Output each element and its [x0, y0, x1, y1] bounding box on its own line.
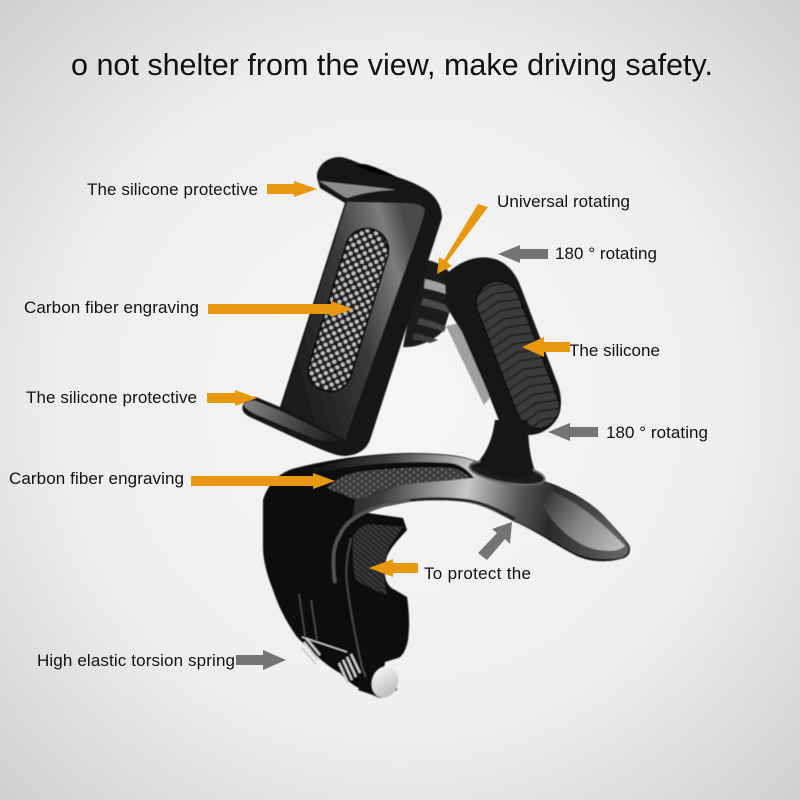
mount collar: [468, 457, 546, 489]
arrow: lower 180 rotating: [548, 423, 598, 441]
callout: universal rotating: [437, 192, 630, 274]
callout: to protect: [369, 559, 531, 583]
callout: cradle carbon fiber: Carbon fiber engraving: [24, 298, 199, 317]
callout: base carbon fiber: [9, 469, 335, 489]
mount neck: [470, 420, 538, 478]
arrow: cradle carbon fiber: [208, 301, 353, 317]
callout: torsion spring: High elastic torsion spring: [37, 651, 235, 670]
callout: top silicone protective: The silicone protective: [87, 180, 258, 199]
black body silhouette: [263, 453, 630, 698]
clip base: [263, 415, 630, 701]
callout: lower 180 rotating: 180 ° rotating: [606, 423, 708, 442]
lower grip surface: [244, 401, 341, 441]
callout: base carbon fiber: Carbon fiber engraving: [9, 469, 184, 488]
top grip slot: [356, 164, 397, 177]
arrow: to protect: [369, 559, 418, 577]
product: dashboard phone holder: [242, 157, 630, 701]
swivel ball joint: [403, 260, 451, 347]
callout: arm silicone: The silicone: [569, 341, 660, 360]
callout: cradle carbon fiber: [24, 298, 353, 317]
arm lower cap over neck: [500, 415, 540, 435]
rim stroke: [333, 500, 410, 583]
callout: universal rotating: Universal rotating: [497, 192, 630, 211]
arrow: universal rotating: [437, 204, 488, 274]
callout: upper 180 rotating: 180 ° rotating: [555, 244, 657, 263]
cradle face: [282, 202, 425, 440]
bridge surface: [300, 454, 629, 559]
phone cradle: [242, 157, 442, 456]
gray arm side strip: [446, 322, 492, 405]
arrow: upper 180 rotating: [498, 245, 548, 263]
cradle shell: [242, 157, 442, 456]
callout: to protect: To protect the: [424, 564, 531, 583]
arrow: torsion spring: [236, 650, 286, 670]
top grip highlight: [319, 181, 396, 198]
steel pin: [358, 663, 403, 701]
carbon fiber oval: [330, 250, 367, 370]
arrow: plate gray diagonal: [478, 522, 512, 560]
ribs: [299, 594, 317, 640]
arrow: lower silicone: [207, 390, 257, 406]
plate surface: [543, 489, 625, 551]
carbon top panel: [327, 467, 470, 500]
arrow: base carbon fiber: [191, 473, 335, 489]
bridge lower lip: [350, 499, 515, 522]
inner protective pad: [353, 524, 403, 595]
title: o not shelter from the view, make driving safety.: [71, 48, 713, 82]
callout: lower 180 rotating: [548, 423, 708, 442]
arrow: top silicone: [267, 181, 317, 197]
callout: lower silicone protective: The silicone protective: [26, 388, 197, 407]
torsion spring: [302, 637, 360, 683]
arm silicone pad: [469, 274, 567, 436]
arrow: arm silicone: [522, 337, 570, 357]
bridge dark band: [298, 462, 474, 500]
mount neck front: [476, 420, 534, 477]
inner edge stroke: [346, 538, 382, 695]
callout: arm silicone: [522, 337, 660, 360]
callout: upper 180 rotating: [498, 244, 657, 263]
rotating arm: [445, 257, 567, 436]
